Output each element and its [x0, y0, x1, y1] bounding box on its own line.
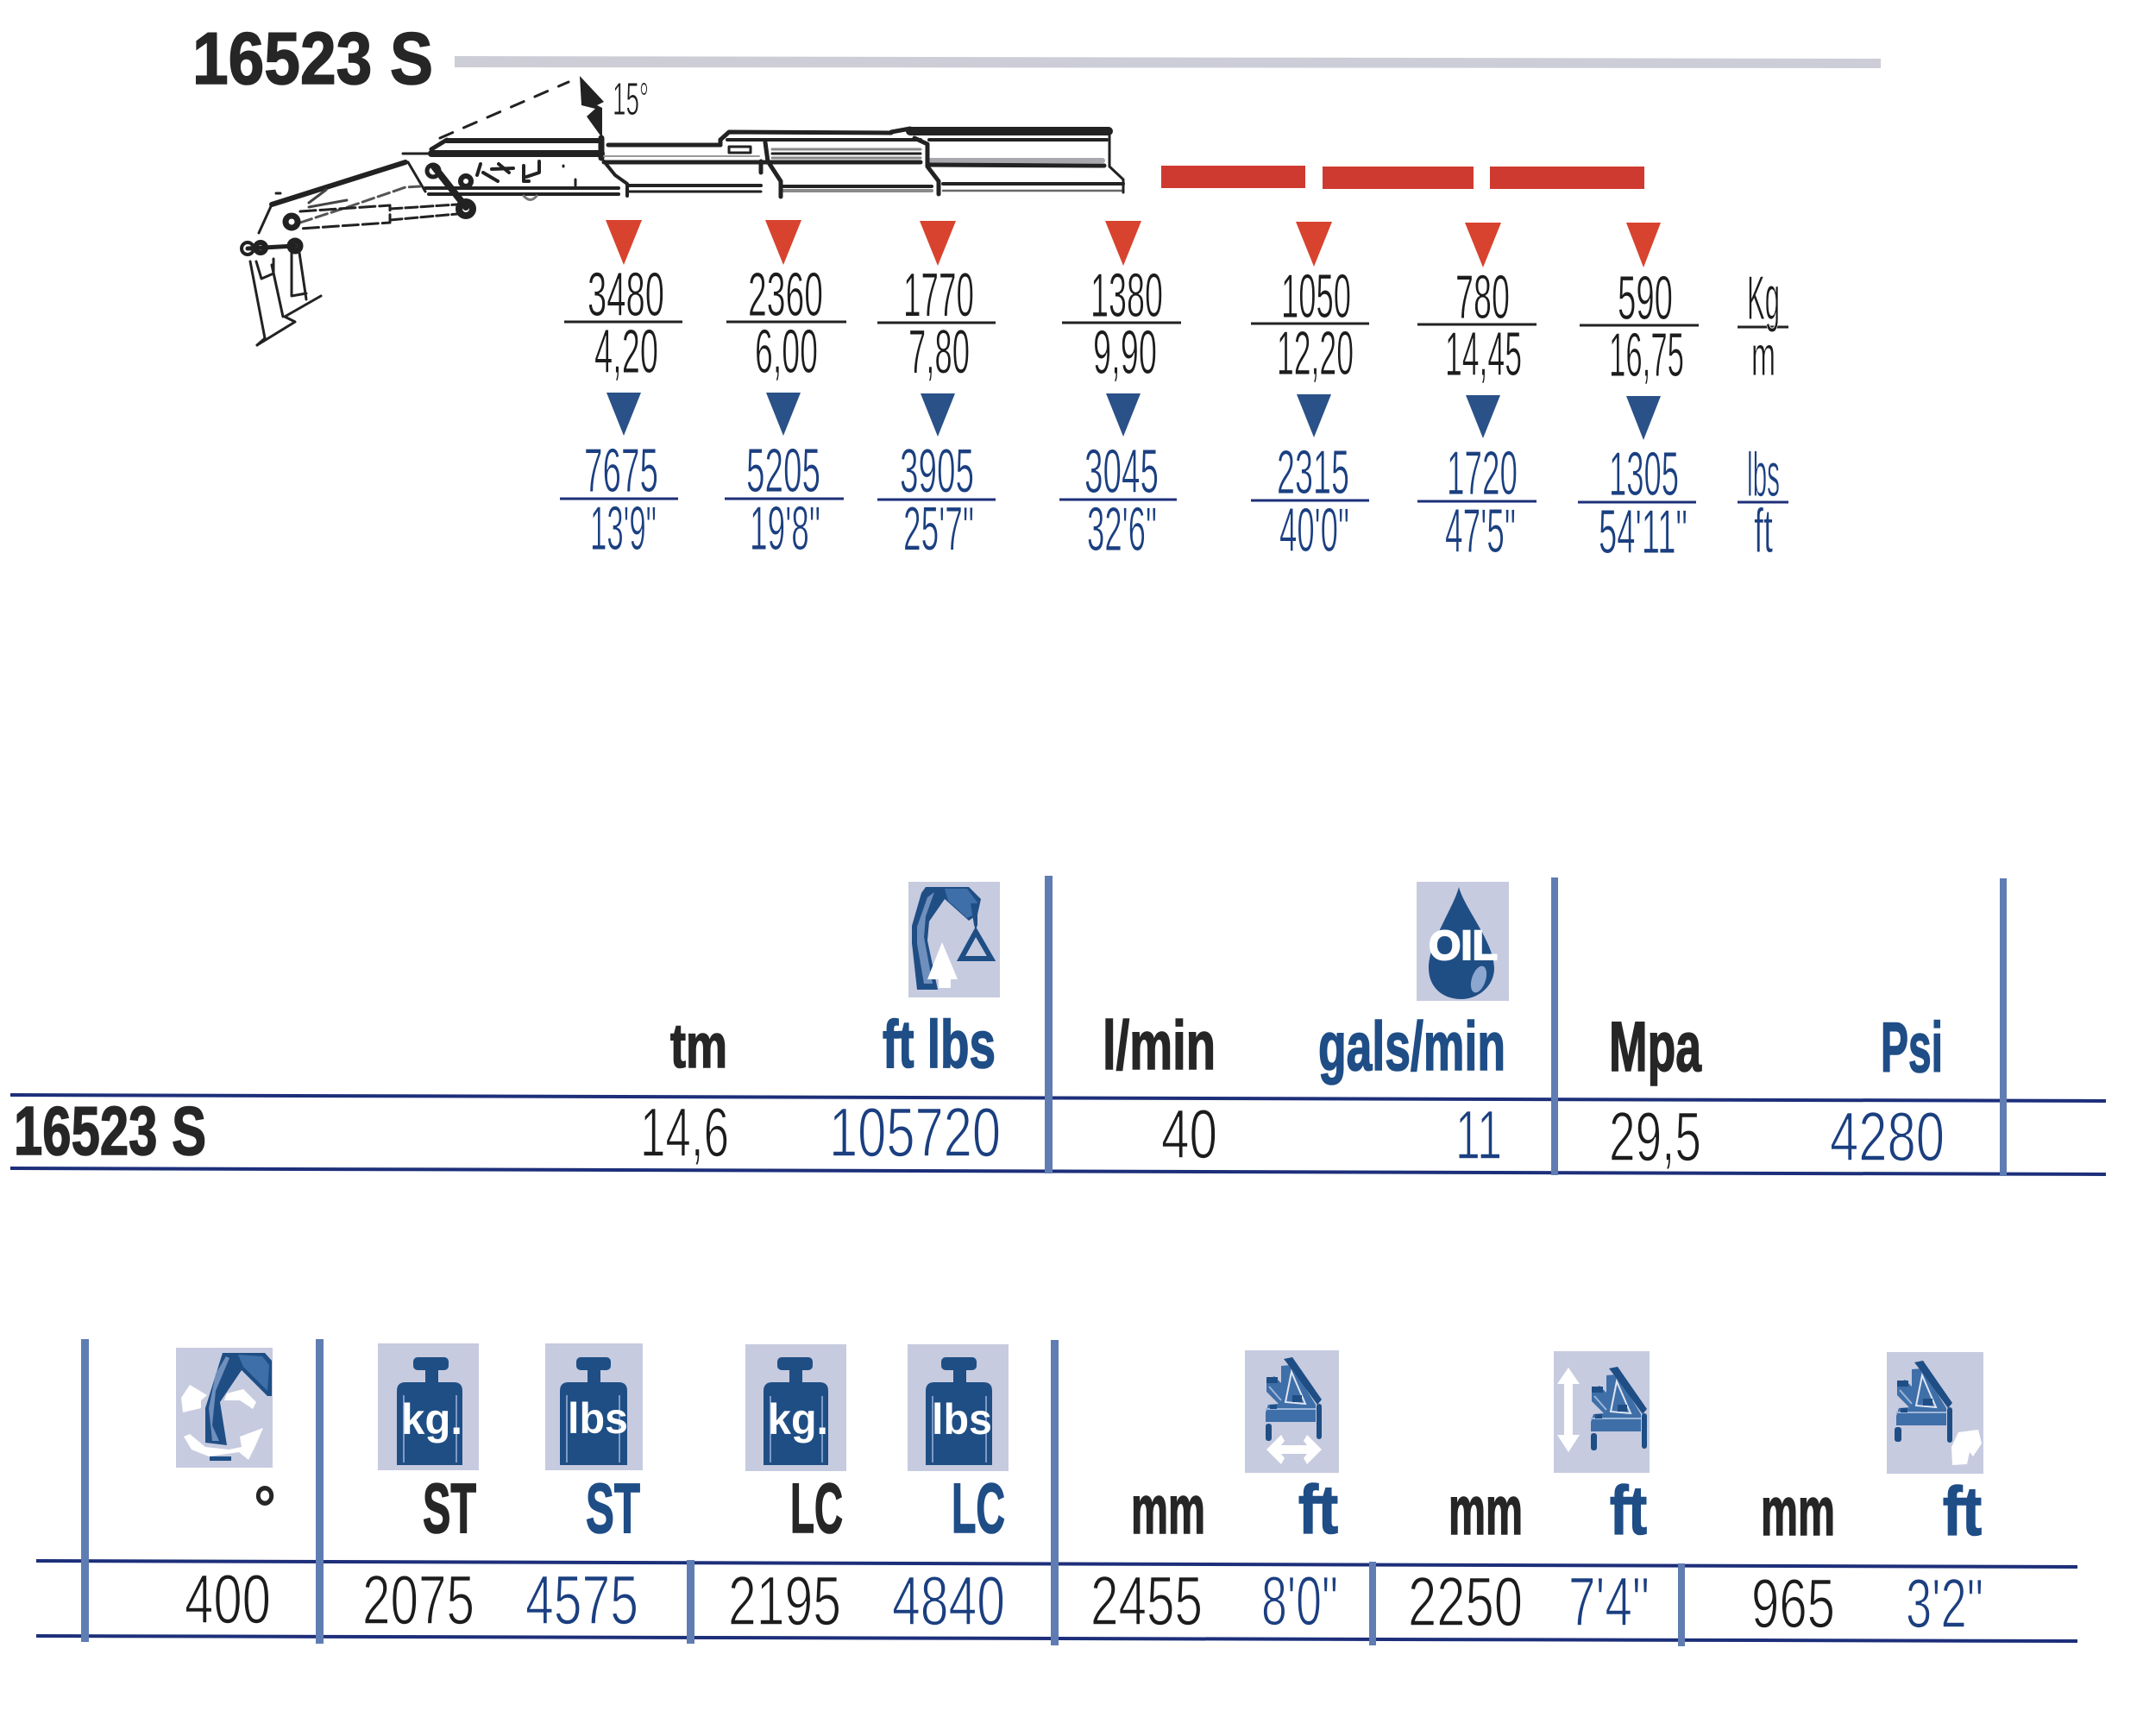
value: 29,5 Mpa: 29,5: [1609, 1098, 1701, 1176]
row label: 16523 S: 16523 S: [14, 1092, 206, 1169]
metric load chart: Kg: [1747, 264, 1780, 333]
crane boom side-view drawing: [242, 76, 1123, 345]
load values in lbs: [584, 437, 1679, 509]
value: 2250 mm: 2250: [1408, 1563, 1523, 1641]
value: 4575 lbs: 4575: [525, 1562, 638, 1639]
header: mm height: mm: [1449, 1472, 1523, 1549]
boom sections: [425, 129, 1123, 197]
header: LC lbs: LC: [952, 1469, 1005, 1548]
icon: lifting moment: [908, 882, 1000, 997]
header: LC kg: LC: [790, 1469, 843, 1548]
header: ft width: ft: [1298, 1471, 1338, 1548]
metric unit labels: m: [1751, 324, 1775, 387]
header: ft height: ft: [1610, 1472, 1647, 1549]
icon: weight kg standard: kg.: [401, 1395, 462, 1444]
metric fraction lines: [564, 322, 1788, 327]
icon: weight lbs standard: lbs: [568, 1394, 628, 1443]
load values in lbs: 1720: [1447, 439, 1518, 508]
extension boom sections (red bars): [1161, 166, 1644, 189]
value: 2455 mm: 2455: [1090, 1563, 1203, 1640]
icon: crane folded height: [1554, 1351, 1650, 1473]
icon: oil drop: [1417, 882, 1509, 1001]
reach values in m: 6,00: [755, 318, 818, 387]
reach values in ft: 19'8": [750, 494, 820, 563]
angle arrow: [580, 76, 604, 138]
header: ST lbs: ST: [586, 1469, 640, 1548]
imperial unit labels: [1747, 441, 1780, 566]
reach values in ft: 32'6": [1087, 495, 1157, 564]
load values in kg: 3480: [588, 261, 664, 330]
knuckle joint mechanism: [403, 154, 575, 216]
reach values in m: 4,20: [594, 318, 658, 387]
metric load chart: [564, 220, 1788, 390]
crane column and base: [242, 193, 321, 345]
header: l/min: l/min: [1103, 1007, 1216, 1084]
icon: oil drop: OIL: [1429, 923, 1498, 969]
header: tm: tm: [670, 1012, 727, 1081]
value: 14,6 tm: 14,6: [640, 1094, 729, 1172]
inner boom and cylinder: [272, 162, 457, 229]
column dividers: [1045, 876, 2007, 1176]
icon: weight lbs long: lbs: [932, 1395, 992, 1444]
load values in lbs: 3905: [900, 437, 974, 506]
reach values in m: 9,90: [1093, 318, 1157, 387]
icon: slewing rotation: [176, 1348, 273, 1468]
load values in kg: 780: [1455, 263, 1510, 332]
value: 105720 ft lbs: 105720: [829, 1094, 1001, 1172]
icon: weight kg long: [745, 1344, 846, 1471]
reach values in ft: [590, 494, 1687, 567]
value: 2075 kg: 2075: [362, 1562, 474, 1639]
icon: crane folded depth: [1887, 1352, 1983, 1474]
metric load chart: 16,75: [1609, 321, 1684, 390]
load values in kg: 1050: [1281, 262, 1351, 331]
reach values in ft: 54'11": [1599, 498, 1687, 567]
value: 965 mm: 965: [1751, 1565, 1835, 1643]
header: ST kg: ST: [423, 1469, 476, 1548]
reach values in m: 14,45: [1445, 320, 1522, 389]
icon: crane folded width: [1245, 1350, 1339, 1473]
value: 7'4": 7'4": [1568, 1563, 1650, 1641]
metric unit labels: [1747, 264, 1780, 387]
title rule: [455, 56, 1881, 68]
blue load arrows: [606, 393, 1661, 440]
title: model 16523 S: 16523 S: [192, 18, 433, 100]
table rules: [36, 1561, 2077, 1641]
load values in kg: 590: [1618, 264, 1673, 333]
reach values in ft: 25'7": [903, 495, 974, 564]
reach values in m: 7,80: [908, 318, 970, 387]
header: ft depth: ft: [1943, 1473, 1982, 1550]
header: ft lbs: ft lbs: [883, 1006, 996, 1082]
load values in kg: 2360: [748, 261, 823, 330]
reach values in ft: 40'0": [1279, 496, 1349, 565]
icon: weight lbs long: [908, 1344, 1009, 1471]
table: rotation, weights, dimensions: [36, 1339, 2077, 1646]
header: mm depth: mm: [1761, 1473, 1835, 1550]
header: Psi: Psi: [1881, 1009, 1943, 1087]
load values in lbs: 1305: [1609, 440, 1679, 509]
reach values in ft: 47'5": [1445, 497, 1516, 566]
load values in kg: 1380: [1090, 261, 1163, 330]
column dividers: [81, 1339, 1685, 1646]
reach values in m: 12,20: [1277, 319, 1354, 388]
imperial load chart: lbs: [1747, 441, 1780, 510]
value: 11 gals/min: 11: [1455, 1097, 1502, 1174]
dashed 15 degree swing line: [440, 82, 569, 138]
reach values in ft: 13'9": [590, 494, 657, 563]
value: 40 l/min: 40: [1161, 1096, 1217, 1173]
value: 8'0": 8'0": [1261, 1563, 1338, 1640]
table: lifting moment, oil flow, pressure: [10, 876, 2106, 1176]
load values in lbs: 5205: [746, 437, 820, 506]
load values in lbs: 2315: [1277, 438, 1349, 507]
value: 2195 kg: 2195: [728, 1563, 841, 1640]
header: mm width: mm: [1131, 1471, 1205, 1548]
reach values in m: [594, 318, 1684, 390]
load values in kg: 1770: [903, 261, 974, 330]
imperial fraction lines: [560, 499, 1788, 502]
header: gals/min: gals/min: [1318, 1008, 1505, 1085]
value: 4280 Psi: 4280: [1830, 1098, 1945, 1176]
red load arrows: [606, 220, 1661, 267]
angle label 15 degrees: 15°: [613, 73, 649, 125]
value: 4840 lbs: 4840: [892, 1563, 1005, 1640]
value: 3'2": 3'2": [1906, 1565, 1983, 1643]
imperial load chart: [560, 393, 1788, 567]
header: Mpa: Mpa: [1609, 1008, 1702, 1086]
icon: weight kg long: kg.: [768, 1395, 828, 1444]
icon: weight kg standard: [378, 1343, 479, 1470]
icon: weight lbs standard: [545, 1343, 643, 1470]
value: 400 degrees: 400: [185, 1561, 271, 1639]
imperial unit labels: ft: [1754, 497, 1773, 566]
load values in lbs: 3045: [1084, 437, 1159, 506]
load values in kg: [588, 261, 1673, 333]
header: degrees: °: [254, 1472, 276, 1544]
table rules: [10, 1095, 2106, 1174]
load values in lbs: 7675: [584, 437, 658, 506]
